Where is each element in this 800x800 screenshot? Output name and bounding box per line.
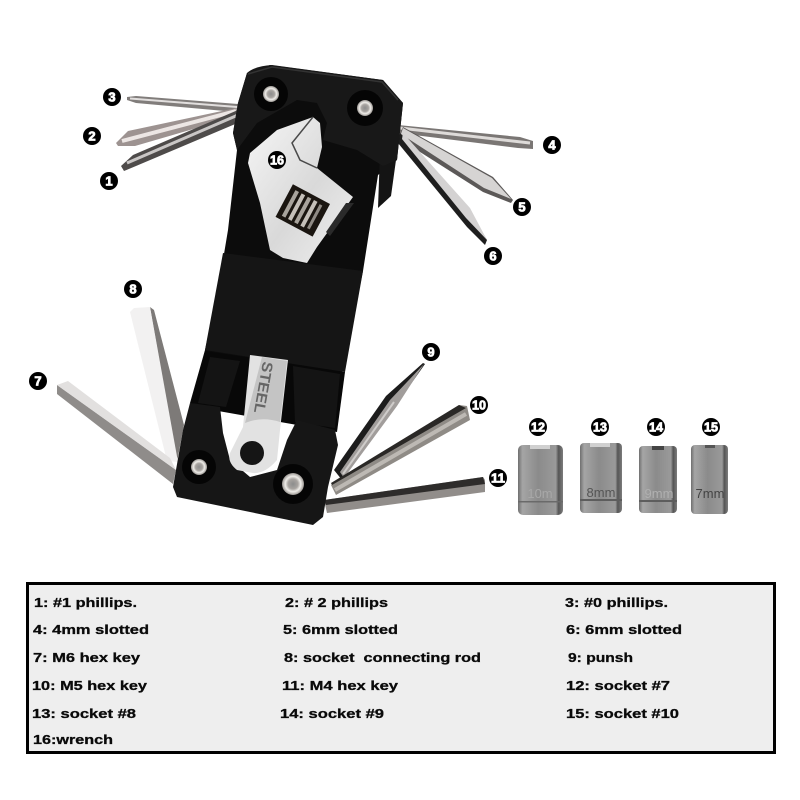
wrench: slot in jaw	[326, 203, 354, 236]
socket 13 size stamp: 8mm	[587, 485, 615, 500]
badge 10: 10	[472, 398, 486, 412]
legend item 5: 5: 6mm slotted	[283, 622, 398, 637]
wrench: lower handle	[229, 355, 288, 473]
badge 11: 11	[491, 470, 505, 486]
badge 13: 13	[593, 420, 607, 434]
badge 16: 16	[270, 152, 284, 168]
screw: top left	[254, 77, 288, 111]
badge 7: 7	[34, 374, 42, 388]
screw: bottom left	[182, 450, 216, 484]
legend panel	[28, 584, 774, 752]
legend item 15: 15: socket #10	[566, 706, 679, 721]
badge 1	[100, 172, 118, 190]
socket 13	[580, 443, 622, 513]
badge 15: 15	[704, 420, 718, 434]
badge 15	[702, 418, 720, 436]
wrench: ring hole	[240, 441, 264, 465]
legend item 4: 4: 4mm slotted	[33, 622, 149, 637]
badge 10	[470, 396, 488, 414]
tool: 4mm slotted bit (4)	[398, 125, 533, 149]
body: top cap	[233, 65, 403, 166]
badge 2	[83, 127, 101, 145]
body: bottom cap	[173, 403, 338, 525]
legend item 3: 3: #0 phillips.	[565, 595, 668, 610]
wrench: upper head	[248, 117, 354, 263]
tool: 6mm slotted bit (6)	[398, 133, 487, 245]
legend item 13: 13: socket #8	[32, 706, 136, 721]
tool: M6 hex key (7)	[57, 381, 176, 484]
tool: #0 phillips bit (3)	[127, 96, 238, 112]
tool: socket connecting rod (8)	[130, 307, 184, 462]
badge 9: 9	[427, 344, 435, 360]
badge 13	[591, 418, 609, 436]
body: right side clip	[378, 152, 396, 208]
body: sleeve band	[205, 253, 363, 372]
badge 7	[29, 372, 47, 390]
screw: bottom right	[273, 464, 313, 504]
badge 5: 5	[518, 200, 526, 214]
badge 2: 2	[88, 128, 96, 144]
tool: #2 phillips bit (2)	[116, 108, 238, 146]
badge 9	[422, 343, 440, 361]
body: top cap highlight	[248, 67, 398, 100]
tool: M5 hex key (10)	[331, 405, 470, 495]
wrench: adjusting worm	[276, 184, 330, 237]
legend item 1: 1: #1 phillips.	[34, 595, 137, 610]
badge 11	[489, 469, 507, 487]
legend background	[28, 584, 774, 752]
wrench: STEEL stamp: STEEL	[250, 360, 276, 414]
tool: 6mm slotted bit (5)	[398, 127, 513, 203]
legend item 8: 8: socket connecting rod	[284, 650, 481, 665]
socket 15 size stamp: 7mm	[696, 486, 724, 501]
socket 12	[518, 445, 563, 515]
legend item 7: 7: M6 hex key	[33, 650, 141, 665]
body: right lower block	[293, 366, 340, 428]
body: left lower block	[198, 357, 240, 407]
badge 3: 3	[108, 90, 116, 104]
legend item 2: 2: # 2 phillips	[285, 595, 388, 610]
wrench: jaw gap	[292, 117, 317, 168]
badge 4: 4	[548, 138, 556, 152]
legend item 6: 6: 6mm slotted	[566, 622, 682, 637]
badge 8	[124, 280, 142, 298]
badge 3	[103, 88, 121, 106]
socket 12 size stamp: 10m	[527, 486, 553, 501]
legend item 11: 11: M4 hex key	[282, 678, 399, 693]
legend item 16: 16:wrench	[33, 732, 113, 747]
socket 15	[691, 445, 728, 514]
tool: punch (9)	[334, 363, 425, 480]
badge 16	[268, 151, 286, 169]
wrench: raised label recess	[245, 357, 287, 423]
tool: M4 hex key (11)	[324, 477, 485, 513]
tool body	[173, 65, 403, 525]
legend item 12: 12: socket #7	[566, 678, 670, 693]
legend item 9: 9: punsh	[568, 650, 633, 665]
badge 4	[543, 136, 561, 154]
legend item 10: 10: M5 hex key	[32, 678, 148, 693]
badge 14: 14	[649, 420, 664, 434]
badge 14	[647, 418, 665, 436]
badge 6: 6	[489, 248, 497, 264]
tool: #1 phillips bit (1)	[121, 110, 240, 171]
badge 12: 12	[531, 420, 545, 434]
badge 1: 1	[105, 174, 113, 188]
body: lower channel	[190, 351, 345, 432]
socket 14	[639, 446, 677, 513]
socket 14 size stamp: 9mm	[645, 486, 673, 501]
badge 12	[529, 418, 547, 436]
badge 5	[513, 198, 531, 216]
body: black frame	[190, 65, 403, 430]
legend item 14: 14: socket #9	[280, 706, 384, 721]
badge 6	[484, 247, 502, 265]
badge 8: 8	[129, 282, 137, 296]
screw: top right	[347, 90, 383, 126]
